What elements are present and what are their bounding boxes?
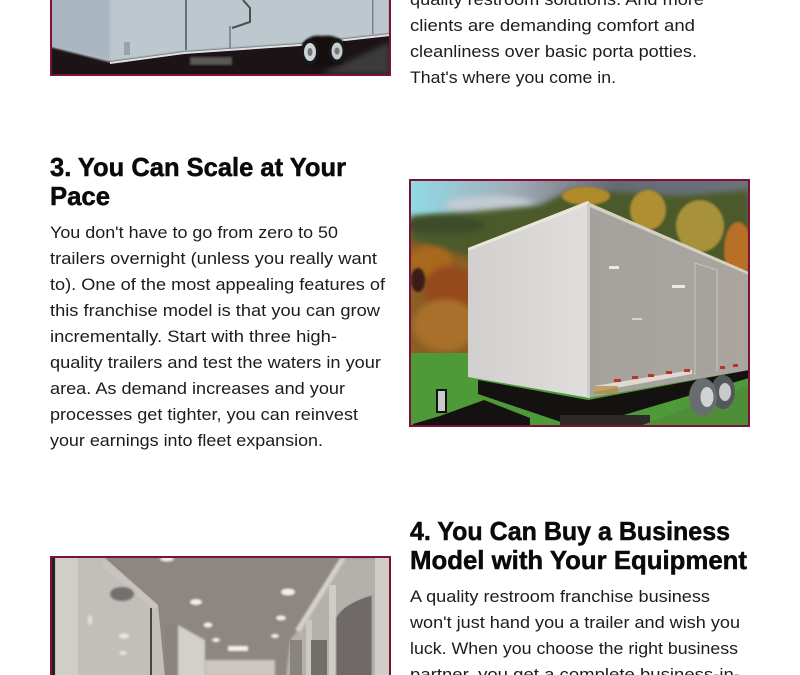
text block: scale at your pace: trailers overnight (unless you really want bbox=[50, 249, 377, 268]
heading: 4. You Can Buy a Business Model with Your Equipment bbox=[410, 516, 747, 575]
text block: scale at your pace: to). One of the most appealing features of bbox=[50, 275, 385, 294]
heading: 3. You Can Scale at Your Pace bbox=[50, 152, 346, 211]
text block: scale at your pace: this franchise model is that you can grow bbox=[50, 301, 381, 320]
photo: white restroom trailer side view bbox=[51, 0, 390, 75]
text block: business model: luck. When you choose the right business bbox=[410, 639, 738, 658]
photo: trailer in autumn field bbox=[405, 180, 752, 427]
text block: scale at your pace: quality trailers and test the waters in your bbox=[50, 353, 381, 372]
text block: scale at your pace: your earnings into fleet expansion. bbox=[50, 431, 323, 450]
text block: intro paragraph ending: That's where you come in. bbox=[410, 68, 616, 87]
text block: business model: won't just hand you a trailer and wish you bbox=[409, 613, 740, 632]
text block: intro paragraph ending: cleanliness over basic porta potties. bbox=[410, 42, 697, 61]
heading: 4. You Can Buy a Business Model with Your Equipment: Model with Your Equipment bbox=[410, 545, 747, 575]
heading: 4. You Can Buy a Business Model with Your Equipment: 4. You Can Buy a Business bbox=[410, 516, 730, 546]
heading: 3. You Can Scale at Your Pace: 3. You Can Scale at Your bbox=[50, 152, 346, 182]
heading: 3. You Can Scale at Your Pace: Pace bbox=[50, 181, 110, 211]
text block: intro paragraph ending: clients are demanding comfort and bbox=[410, 16, 695, 35]
text block: scale at your pace: incrementally. Start with three high- bbox=[50, 327, 337, 346]
text block: scale at your pace bbox=[50, 223, 385, 450]
text block: scale at your pace: processes get tighter, you can reinvest bbox=[50, 405, 358, 424]
text block: scale at your pace: area. As demand increases and your bbox=[50, 379, 345, 398]
text block: business model: A quality restroom franchise business bbox=[410, 587, 710, 606]
text block: scale at your pace: You don't have to go from zero to 50 bbox=[50, 223, 338, 242]
text block: intro paragraph ending bbox=[410, 0, 704, 87]
photo: trailer restroom interior bbox=[51, 556, 390, 675]
text block: business model bbox=[409, 587, 740, 675]
